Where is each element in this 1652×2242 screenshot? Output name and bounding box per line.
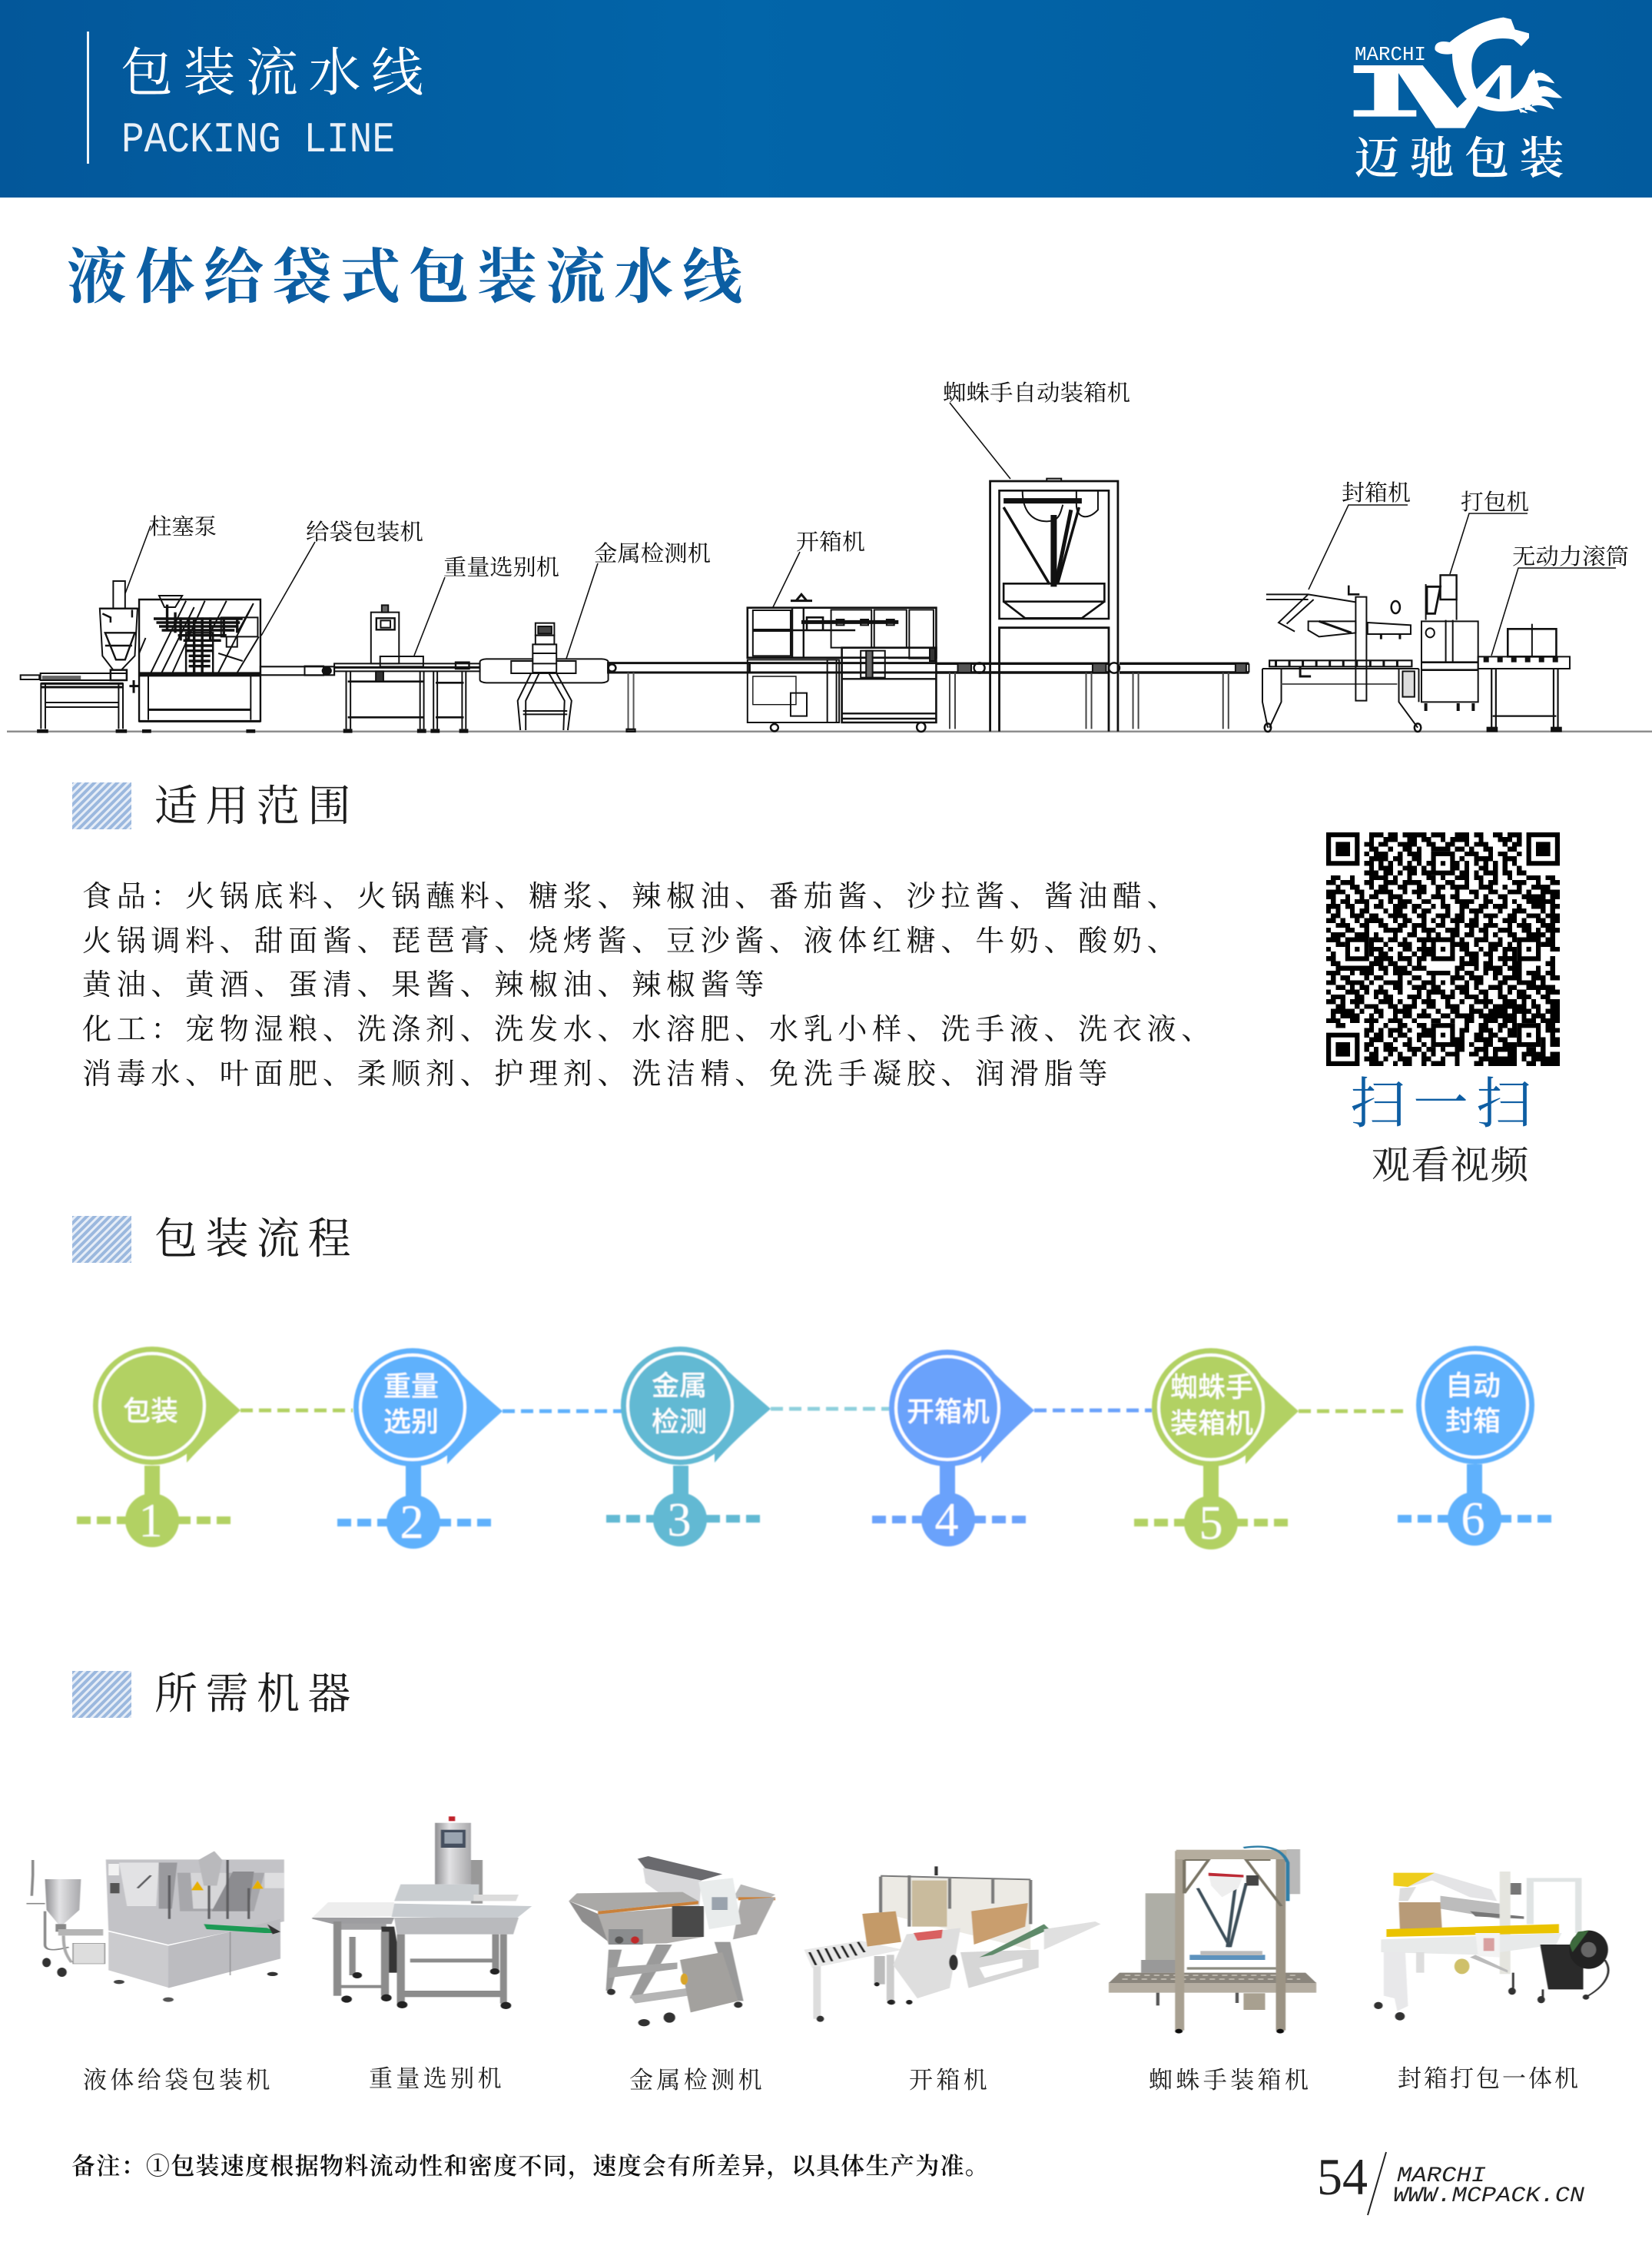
banner title: 包装流水线 — [121, 44, 434, 102]
step 3 — [606, 1347, 771, 1546]
section heading: machines: 所需机器 — [154, 1671, 359, 1719]
step 5: 装箱机 — [1170, 1407, 1253, 1439]
photo: metal detector — [569, 1856, 775, 2026]
text block: applicable products: 黄油、黄酒、蛋清、果酱、辣椒油、辣椒酱等 — [82, 969, 769, 1001]
step 4: 开箱机 — [907, 1396, 990, 1427]
footnote: 备注：①包装速度根据物料流动性和密度不同，速度会有所差异，以具体生产为准。 — [71, 2153, 990, 2181]
logo: MARCHI — [1355, 43, 1426, 66]
text block: applicable products: 食品：火锅底料、火锅蘸料、糖浆、辣椒油、番茄酱、沙拉酱、酱油醋、 — [82, 881, 1181, 913]
step 3: 3 — [667, 1494, 692, 1546]
banner subtitle: PACKING LINE — [121, 115, 395, 164]
machine: metal detector — [480, 623, 609, 730]
caption: case erector: 开箱机 — [909, 2067, 990, 2094]
callout: plunger pump: 柱塞泵 — [149, 514, 217, 540]
callout: pouch packing machine — [261, 520, 423, 636]
step 5: 蜘蛛手 — [1170, 1371, 1253, 1403]
step 1: 1 — [138, 1495, 163, 1547]
step 5 — [1134, 1348, 1299, 1549]
callout: case sealer: 封箱机 — [1342, 480, 1411, 506]
callout: roller table: 无动力滚筒 — [1512, 544, 1629, 570]
header banner — [0, 0, 1652, 198]
step 2 — [337, 1348, 503, 1549]
step 6: 封箱 — [1445, 1405, 1501, 1437]
logo — [1354, 18, 1574, 184]
caption: spider packer: 蜘蛛手装箱机 — [1149, 2067, 1312, 2094]
callout: checkweigher — [414, 555, 559, 656]
conveyor to case erector — [609, 663, 749, 732]
step 4 — [872, 1350, 1034, 1546]
machine: spider robot case packer — [990, 479, 1118, 732]
photo: checkweigher — [312, 1816, 532, 2009]
callout: checkweigher: 重量选别机 — [443, 555, 559, 580]
machine photos row 1 — [26, 1816, 775, 2026]
callout: spider case packer — [943, 380, 1130, 479]
caption: sealer strapper: 封箱打包一体机 — [1398, 2065, 1581, 2092]
step 6 — [1398, 1346, 1552, 1546]
callout: case sealer — [1309, 480, 1411, 590]
step 2: 重量 — [383, 1370, 439, 1402]
page number and website — [1317, 2147, 1584, 2215]
production line drawing — [7, 479, 1652, 732]
callout: spider case packer: 蜘蛛手自动装箱机 — [943, 380, 1130, 406]
step 6: 6 — [1461, 1493, 1484, 1546]
photo: pouch packer with pump — [26, 1851, 284, 2002]
callout: case erector — [773, 530, 865, 607]
machine: unpowered roller table — [1478, 624, 1570, 731]
section heading: process: 包装流程 — [154, 1216, 359, 1264]
callout: plunger pump — [125, 514, 217, 593]
caption: pouch packer: 液体给袋包装机 — [83, 2067, 274, 2094]
step 2: 2 — [400, 1496, 424, 1549]
main title: 液体给袋式包装流水线 — [67, 244, 751, 311]
machine: plunger pump and table — [21, 581, 138, 732]
photo: case erector — [804, 1866, 1100, 2022]
step 4: 4 — [934, 1494, 959, 1546]
machine: case sealer — [1262, 586, 1421, 732]
step 1: 包装 — [123, 1395, 178, 1427]
step 3: 金属 — [652, 1370, 707, 1401]
photo: spider case packer — [1109, 1847, 1316, 2034]
page number and website: MARCHI — [1397, 2164, 1486, 2188]
conveyors through spider machine — [936, 663, 1249, 729]
QR code — [1326, 832, 1560, 1066]
step 2: 选别 — [383, 1406, 439, 1437]
step 6: 自动 — [1445, 1370, 1501, 1401]
QR caption: scan: 扫一扫 — [1350, 1074, 1539, 1135]
callout: metal detector: 金属检测机 — [594, 541, 711, 566]
callout: pouch packing machine: 给袋包装机 — [306, 520, 423, 545]
machine: strapping machine — [1421, 575, 1478, 711]
machine photos row 2 — [804, 1847, 1608, 2034]
connector lines — [241, 1409, 1408, 1411]
step 3: 检测 — [652, 1406, 707, 1437]
conveyor after pouch machine — [260, 666, 334, 676]
step 1 — [77, 1347, 241, 1547]
photo: case sealer and strapper — [1374, 1872, 1608, 2021]
caption: checkweigher: 重量选别机 — [369, 2065, 505, 2092]
caption: metal detector: 金属检测机 — [629, 2067, 765, 2094]
callout: strapping machine — [1450, 490, 1529, 574]
section heading: scope: 适用范围 — [154, 783, 359, 831]
page number and website: 54 — [1317, 2147, 1368, 2206]
machine: case erector — [748, 594, 936, 732]
QR caption: watch video: 观看视频 — [1372, 1144, 1530, 1187]
callout: metal detector — [566, 541, 711, 659]
machine: checkweigher — [334, 605, 480, 732]
text block: applicable products: 化工：宠物湿粮、洗涤剂、洗发水、水溶肥、水乳小样、洗手液、洗衣液、 — [82, 1014, 1216, 1046]
callout: strapping machine: 打包机 — [1461, 490, 1529, 515]
callout: roller table — [1491, 544, 1629, 656]
page number and website: WWW.MCPACK.CN — [1393, 2184, 1584, 2208]
logo: 迈驰包装 — [1355, 134, 1574, 184]
callout: case erector: 开箱机 — [796, 530, 865, 555]
step 5: 5 — [1199, 1497, 1223, 1549]
machine: pouch packing machine — [129, 596, 260, 732]
process flow — [77, 1346, 1552, 1549]
text block: applicable products: 消毒水、叶面肥、柔顺剂、护理剂、洗洁精、免洗手凝胶、润滑脂等 — [82, 1058, 1113, 1091]
text block: applicable products: 火锅调料、甜面酱、琵琶膏、烧烤酱、豆沙酱、液体红糖、牛奶、酸奶、 — [82, 925, 1181, 958]
text block: applicable products — [82, 881, 1216, 1091]
